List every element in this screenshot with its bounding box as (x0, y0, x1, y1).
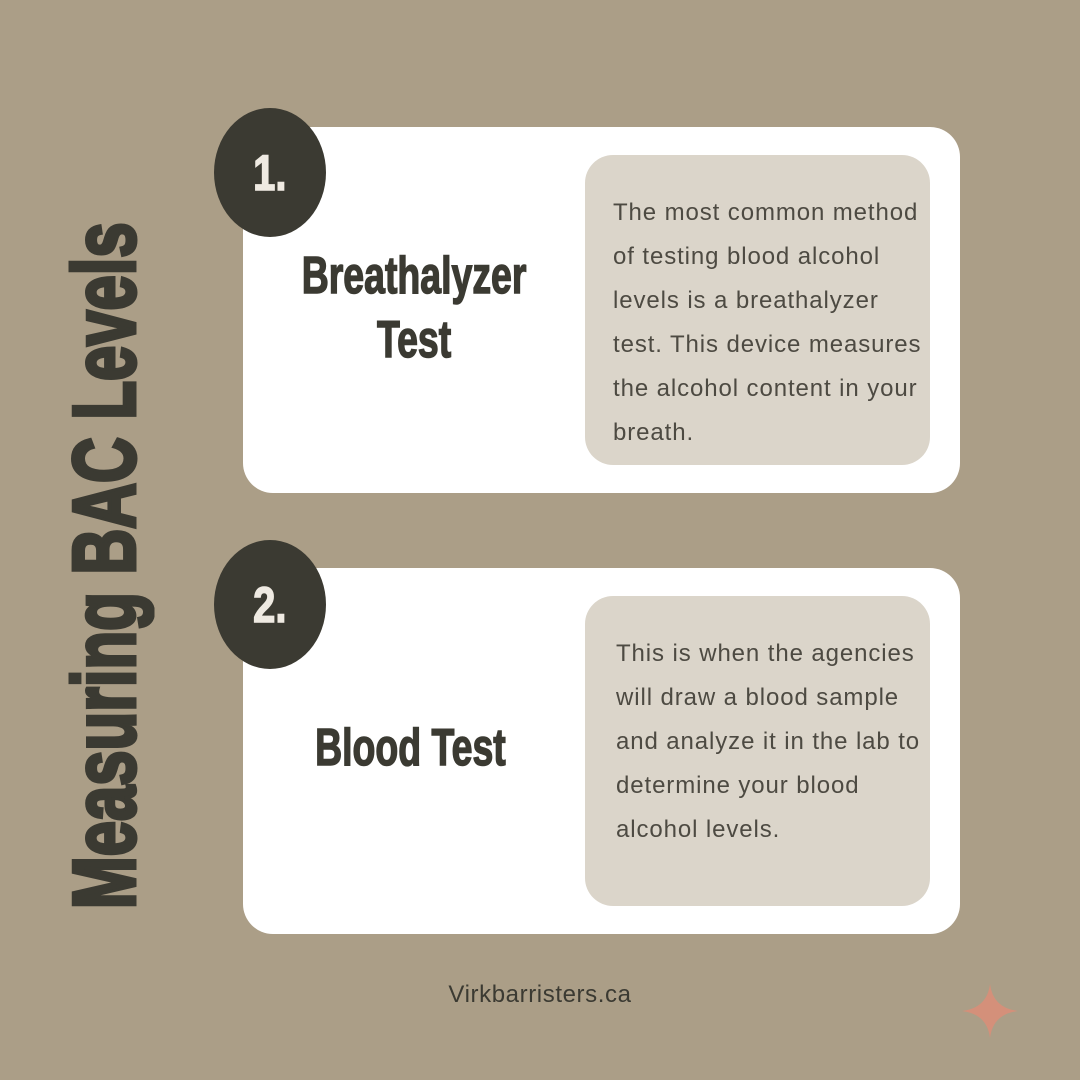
icon: number 2: 2. (253, 576, 287, 632)
panel: card 2 (243, 568, 960, 934)
heading: breathalyzer: Breathalyzer (302, 247, 526, 305)
icon: number 1 (214, 108, 326, 237)
text: breathalyzer description: The most common method of testing blood alcohol levels is a breathalyzer test. This device measures the alcohol content in your breath. (613, 199, 921, 446)
title: vertical: Measuring BAC Levels (54, 223, 154, 909)
icon: number 2 (214, 540, 326, 669)
footer: Virkbarristers.ca (448, 981, 632, 1008)
icon: star (962, 984, 1017, 1038)
heading: breathalyzer (302, 247, 526, 369)
heading: breathalyzer: Test (377, 311, 451, 369)
icon: number 1: 1. (253, 144, 287, 200)
text box 2 (585, 596, 930, 906)
heading: blood test: Blood Test (315, 719, 505, 777)
panel: card 1 (243, 127, 960, 493)
text: blood test description: This is when the agencies will draw a blood sample and analyze it in the lab to determine your blood alcohol levels. (616, 640, 920, 843)
text box 1 (585, 155, 930, 465)
